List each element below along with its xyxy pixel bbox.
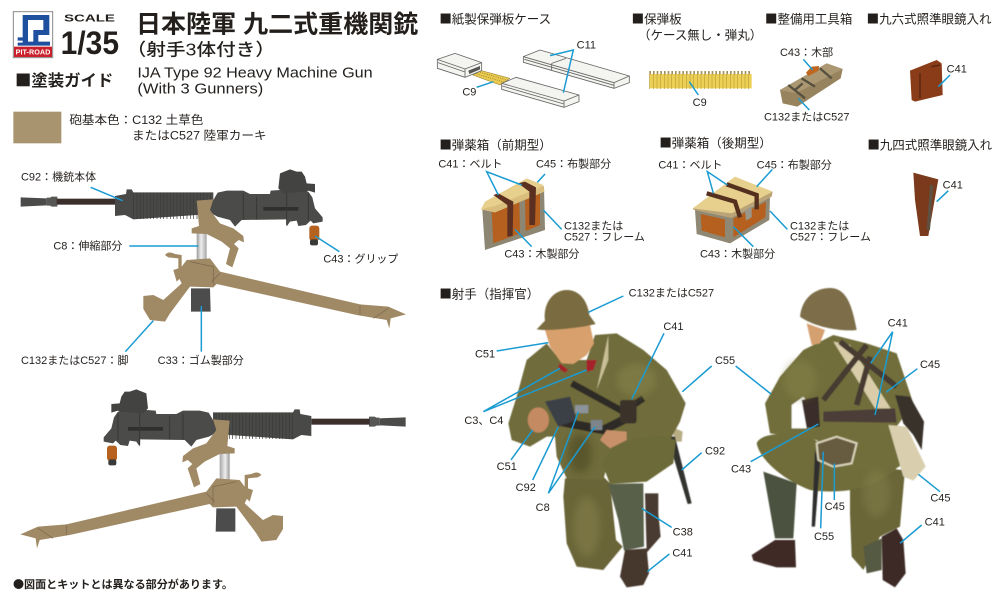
label: C8: C8 — [536, 502, 550, 514]
label: C92 sword: C92 — [705, 446, 725, 458]
label: C92: C92：機銃本体 — [21, 170, 96, 184]
subheading: clip: （ケース無し・弾丸） — [638, 25, 762, 43]
label: C33 — [158, 306, 244, 367]
label: C41 belt — [658, 159, 727, 193]
soldier back shading — [783, 360, 890, 517]
label: C11: C11 — [577, 39, 596, 51]
label: C41 — [937, 179, 963, 202]
machine gun, upper view — [21, 169, 406, 367]
label: frame: C132または — [564, 219, 623, 232]
label: C92: C92 — [516, 482, 536, 494]
heading: ■弾薬箱（前期型） — [439, 135, 552, 153]
label: C38 — [642, 508, 693, 539]
panel: ammo box late type — [658, 133, 993, 260]
label: C45 cloth — [536, 157, 611, 182]
heading: type 94 case: ■九四式照準眼鏡入れ — [867, 135, 993, 153]
label: C51 hand — [497, 430, 533, 473]
label: C55 line — [682, 366, 712, 392]
label: C132 or C527 — [21, 321, 153, 367]
label: C92 — [21, 170, 123, 201]
colour swatch — [13, 112, 61, 143]
label: C132 or C527 — [588, 287, 714, 312]
label: C55: C55 — [715, 355, 735, 367]
subtitle: （射手3体付き） — [127, 40, 275, 60]
label: C43: C43 — [731, 464, 751, 476]
heading: ■紙製保弾板ケース — [439, 9, 551, 27]
label: C41 boot — [900, 516, 945, 543]
label: C41 boot: C41 — [925, 516, 945, 528]
label: C41 belt — [438, 159, 522, 195]
label: C41: C41 — [663, 321, 683, 333]
heading: clip: ■保弾板 — [632, 9, 682, 27]
label: C41 belt: C41：ベルト — [658, 159, 722, 171]
label: frame: C527：フレーム — [790, 231, 871, 244]
label: C9 clip — [689, 82, 707, 109]
label: C8 — [536, 412, 595, 514]
label: C41: C41 — [947, 63, 967, 75]
label: C45 bag — [918, 474, 950, 504]
machine gun, mirrored view — [20, 389, 406, 548]
label: C43 — [731, 424, 818, 476]
label: C43 wood: C43：木製部分 — [700, 246, 775, 260]
label: C43 — [315, 236, 398, 266]
label: C45 lower — [825, 463, 845, 513]
label: frame: C132または — [790, 219, 849, 232]
soldier front figure — [508, 290, 692, 587]
ammo box early — [481, 178, 545, 250]
label: C45 — [886, 359, 940, 392]
label: C55 lower — [814, 452, 834, 543]
heading: ■射手（指揮官） — [439, 284, 539, 302]
label: C33: C33：ゴム製部分 — [158, 353, 244, 367]
label: C43: C43：グリップ — [323, 252, 398, 266]
English title: IJA Type 92 Heavy Machine Gun — [137, 65, 373, 81]
label: C51 — [475, 343, 548, 360]
label: C45 cloth: C45：布製部分 — [757, 157, 832, 171]
base colour text: またはC527 陸軍カーキ — [132, 129, 267, 142]
label: C51: C51 — [475, 348, 495, 360]
label: C45 cloth — [757, 157, 832, 187]
label: C41 boot — [647, 548, 692, 572]
label: frame — [770, 211, 871, 244]
panel: tool box and type 96 case — [764, 9, 992, 124]
label: frame — [543, 210, 645, 244]
label: C41 belt: C41：ベルト — [438, 159, 502, 171]
soldier front shading — [568, 363, 657, 557]
label: C45 lower: C45 — [825, 501, 845, 513]
logo: Pit-Road: PIT-ROAD — [16, 48, 50, 57]
case drawings — [437, 50, 629, 107]
label: C43 wood — [700, 227, 775, 260]
label: C43 wood — [504, 229, 579, 260]
label: C92 — [516, 427, 558, 494]
label: C11 — [550, 39, 596, 93]
panel: gunner front view — [439, 284, 725, 587]
logo: Pit-Road — [14, 15, 52, 57]
label: C41 straps: C41 — [888, 318, 908, 330]
label: C43 wood — [780, 46, 833, 70]
label: C132 or C527: C132またはC527 — [629, 287, 714, 300]
label: C38: C38 — [673, 527, 693, 539]
label: C132 or C527: C132またはC527：脚 — [21, 353, 128, 367]
scale value: 1/35 — [61, 25, 119, 61]
header and paint key — [13, 11, 419, 143]
base colour text: 砲基本色：C132 土草色 — [69, 113, 204, 127]
panel: ammo clip cases — [437, 9, 762, 109]
English subtitle: (With 3 Gunners) — [137, 81, 263, 97]
label: C41 — [938, 63, 967, 87]
label: C45: C45 — [920, 359, 940, 371]
title: 日本陸軍 九二式重機関銃 — [136, 11, 419, 39]
label: C8: C8：伸縮部分 — [53, 238, 122, 252]
panel: ammo box early type — [438, 135, 645, 260]
label: C55 lower: C55 — [814, 531, 834, 543]
label: C41 straps — [871, 318, 908, 415]
ammo clip — [649, 73, 752, 88]
label: C45 bag: C45 — [930, 492, 950, 504]
ammo box late — [693, 177, 773, 243]
type 96 sight case — [910, 60, 943, 102]
label: C41 — [632, 321, 683, 399]
painting guide heading: ■塗装ガイド — [15, 67, 113, 91]
label: C51 hand: C51 — [497, 461, 517, 473]
heading: ■弾薬箱（後期型） — [659, 133, 772, 151]
label: C92 sword — [682, 446, 725, 470]
label: C132 or C527: C132またはC527 — [764, 111, 849, 124]
footnote: ●図面とキットとは異なる部分があります。 — [13, 576, 233, 592]
label: C9 — [462, 82, 493, 99]
label: C9 clip: C9 — [693, 97, 707, 109]
tool box — [780, 63, 843, 107]
panel: gunner back view — [715, 288, 950, 587]
label: C43 wood: C43：木製部分 — [504, 246, 579, 260]
label: C3, C4: C3、C4 — [464, 415, 503, 427]
heading: tool box: ■整備用工具箱 — [765, 9, 852, 27]
label: C55 — [715, 355, 771, 394]
type 94 sight case — [913, 173, 938, 236]
label: C3, C4 — [464, 368, 587, 427]
heading: type 96 case: ■九六式照準眼鏡入れ — [867, 9, 992, 27]
base colour text — [69, 113, 267, 142]
label: C41 boot: C41 — [672, 548, 692, 560]
label: C132 or C527 — [764, 98, 849, 124]
label: C41: C41 — [943, 179, 963, 191]
label: C43 wood: C43：木部 — [780, 46, 833, 59]
label: C45 cloth: C45：布製部分 — [536, 157, 611, 171]
label: frame: C527：フレーム — [564, 231, 645, 244]
scale label: SCALE — [64, 14, 115, 25]
soldier back figure — [752, 288, 926, 587]
label: C9: C9 — [462, 87, 476, 99]
